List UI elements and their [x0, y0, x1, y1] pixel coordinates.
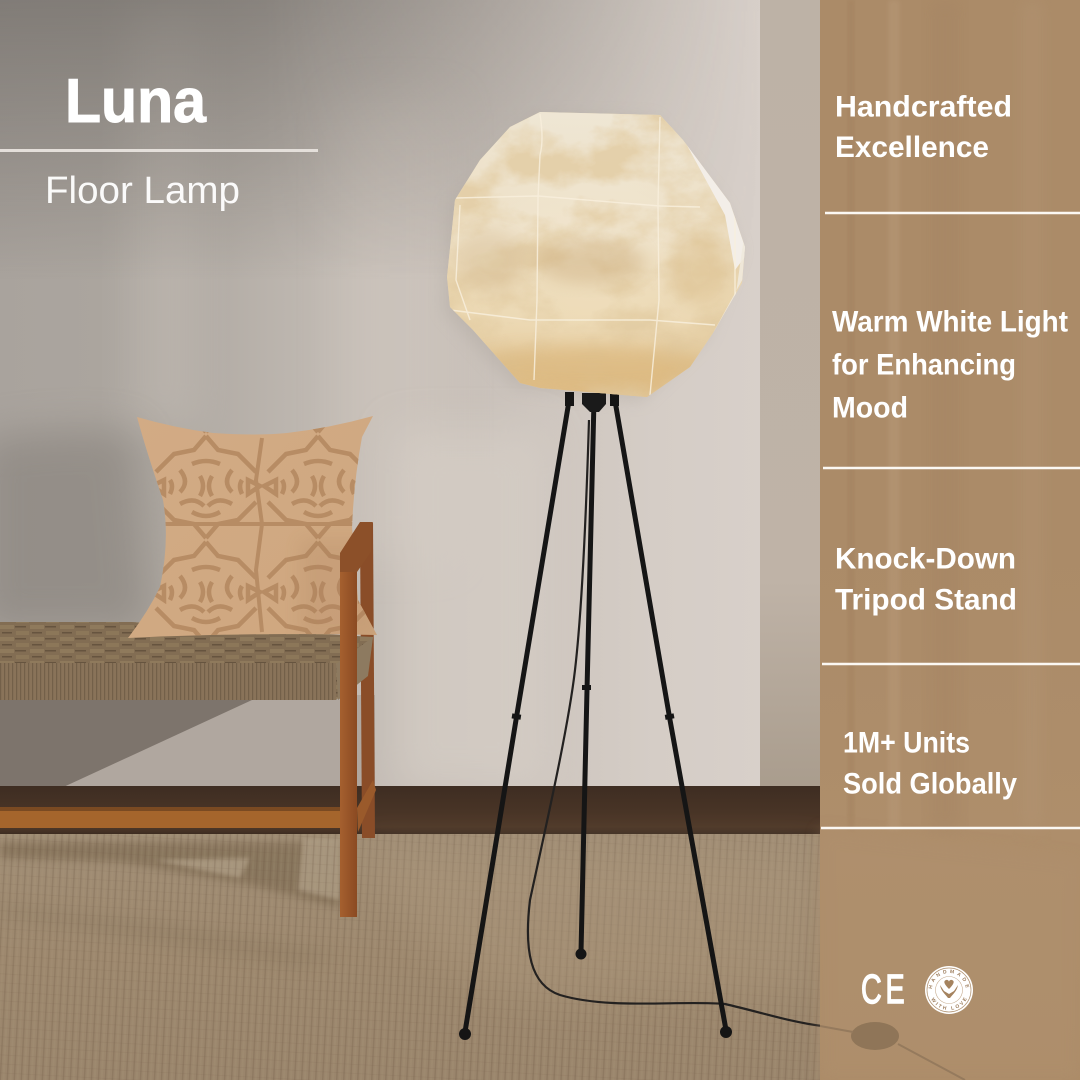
icon: handmade with love badge: WITH LOVE — [932, 997, 967, 1010]
bench lower rail — [0, 780, 376, 832]
icon: handmade with love badge — [925, 966, 973, 1014]
lamp shadow on wall — [444, 116, 739, 401]
lamp cord — [528, 420, 822, 1026]
right leg — [614, 395, 726, 1030]
under-bench wall with diagonal shadow — [0, 695, 375, 790]
wall light and shadow bands — [0, 0, 545, 790]
curtain strip — [760, 0, 822, 830]
feature: warm white light: Warm White Light — [832, 306, 1068, 338]
tripod stand — [459, 392, 732, 1040]
pillow — [120, 410, 380, 642]
foot switch seen through panel — [851, 1022, 899, 1050]
feature: warm white light: Mood — [832, 392, 908, 424]
skirting board — [0, 786, 822, 834]
feature: units sold — [843, 726, 1017, 800]
socket — [582, 393, 606, 412]
bench front post and arm — [340, 522, 372, 917]
carpet floor — [0, 834, 1080, 1080]
wall — [0, 0, 770, 800]
top-left dark wash — [0, 0, 699, 242]
left leg — [465, 395, 570, 1032]
feature: handcrafted excellence — [835, 90, 1012, 164]
panel background — [820, 0, 1080, 1080]
title underline — [0, 149, 318, 152]
floor lamp — [440, 105, 822, 1040]
feature: warm white light — [832, 306, 1068, 424]
feature: handcrafted excellence: Excellence — [835, 131, 989, 164]
bench back post — [360, 522, 375, 838]
divider lines — [821, 213, 1080, 828]
leg joints — [512, 685, 674, 720]
woven seat — [0, 622, 373, 700]
curtain folds — [820, 0, 1080, 1080]
paper lamp shade — [440, 105, 750, 405]
feature: knock-down tripod stand: Knock-Down — [835, 542, 1016, 576]
cord seen through panel — [820, 1026, 965, 1080]
feature: units sold: Sold Globally — [843, 768, 1017, 800]
centre leg — [581, 400, 594, 952]
leg feet — [459, 948, 732, 1040]
feature: handcrafted excellence: Handcrafted — [835, 90, 1012, 124]
title: Luna: Luna — [65, 67, 206, 136]
photo scene: room background — [0, 0, 820, 1080]
subtitle: Floor Lamp: Floor Lamp — [45, 170, 240, 212]
title block — [0, 67, 318, 212]
feature: units sold: 1M+ Units — [843, 726, 970, 760]
icon: handmade with love badge: HANDMADE — [928, 970, 970, 989]
shade seams — [450, 114, 735, 395]
feature: knock-down tripod stand: Tripod Stand — [835, 584, 1017, 616]
bench — [0, 410, 380, 917]
feature: knock-down tripod stand — [835, 542, 1017, 616]
feature: warm white light: for Enhancing — [832, 348, 1016, 382]
icon: CE mark: CE — [861, 967, 905, 1012]
right info panel — [812, 0, 1080, 1080]
